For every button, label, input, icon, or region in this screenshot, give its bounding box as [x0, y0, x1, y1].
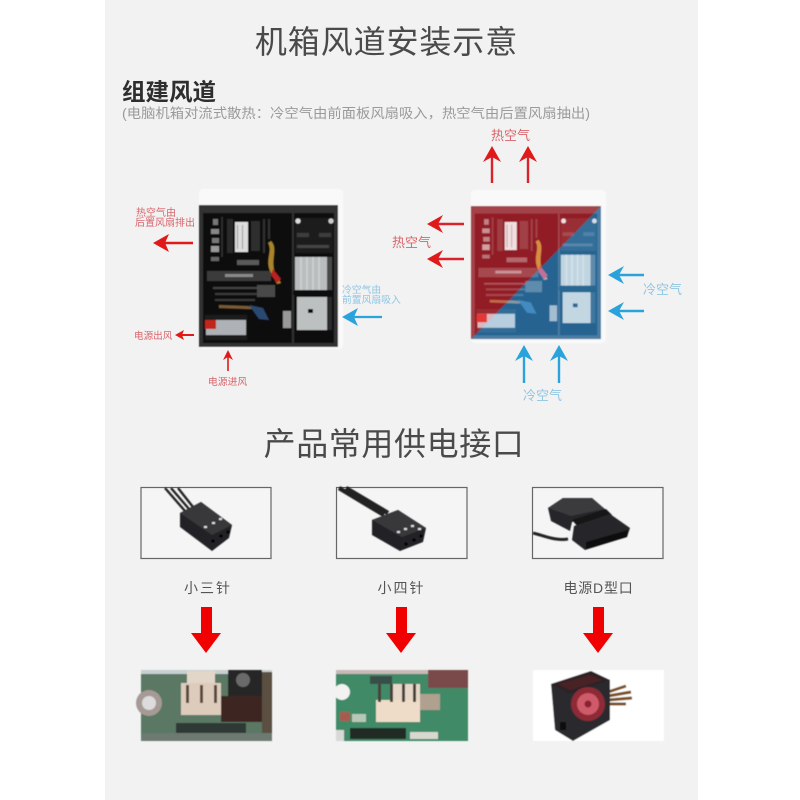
heading: power connectors: 产品常用供电接口 [264, 426, 524, 462]
arrow: cold air intake front [342, 308, 382, 326]
heading: build airflow: 组建风道 [122, 79, 216, 105]
label: hot air top: 热空气 [491, 128, 530, 143]
label: 3-pin: 小三针 [184, 580, 232, 596]
arrow: 4-pin down [386, 607, 416, 653]
arrows: hot air left [427, 215, 464, 268]
label: cold air intake front [342, 283, 401, 306]
label: PSU exhaust: 电源出风 [134, 330, 173, 342]
photo: 3-pin motherboard header [136, 670, 272, 741]
label: hot air exhaust rear: 后置风扇排出 [135, 216, 195, 229]
arrow: PSU intake [223, 350, 233, 371]
panel: open PC case photo [199, 189, 343, 349]
title: 机箱风道安装示意 [255, 24, 518, 60]
panel: D-type power connector [532, 488, 663, 558]
label: 4-pin: 小四针 [378, 580, 426, 596]
panel: 3-pin connector [141, 488, 271, 558]
arrow: PSU exhaust [175, 330, 194, 340]
label: cold air bottom: 冷空气 [523, 388, 562, 403]
label: cold air intake front: 冷空气由 [342, 283, 381, 296]
photo: 4-pin motherboard header [334, 670, 468, 741]
label: hot air exhaust rear: 热空气由 [136, 206, 176, 219]
panel: page background [105, 0, 698, 800]
label: cold air intake front: 前置风扇吸入 [342, 293, 401, 306]
arrows: hot air top [483, 146, 537, 183]
label: PSU intake: 电源进风 [208, 375, 247, 388]
arrows: cold air bottom [515, 345, 568, 383]
arrow: D-type down [583, 607, 613, 653]
arrow: 3-pin down [191, 607, 221, 653]
photo: power supply unit [533, 670, 664, 741]
label: hot air left: 热空气 [392, 235, 431, 250]
panel: airflow overlay case [471, 190, 606, 343]
label: hot air exhaust rear [135, 206, 195, 229]
panel: 4-pin connector [336, 488, 467, 558]
label: D-type: 电源D型口 [563, 580, 634, 596]
text block: airflow description: (电脑机箱对流式散热：冷空气由前面板风扇吸入，热空气由后置风扇抽出) [122, 105, 590, 121]
arrows: cold air right [608, 266, 644, 320]
arrow: hot air exhaust rear [153, 234, 193, 252]
label: cold air right: 冷空气 [643, 282, 682, 297]
